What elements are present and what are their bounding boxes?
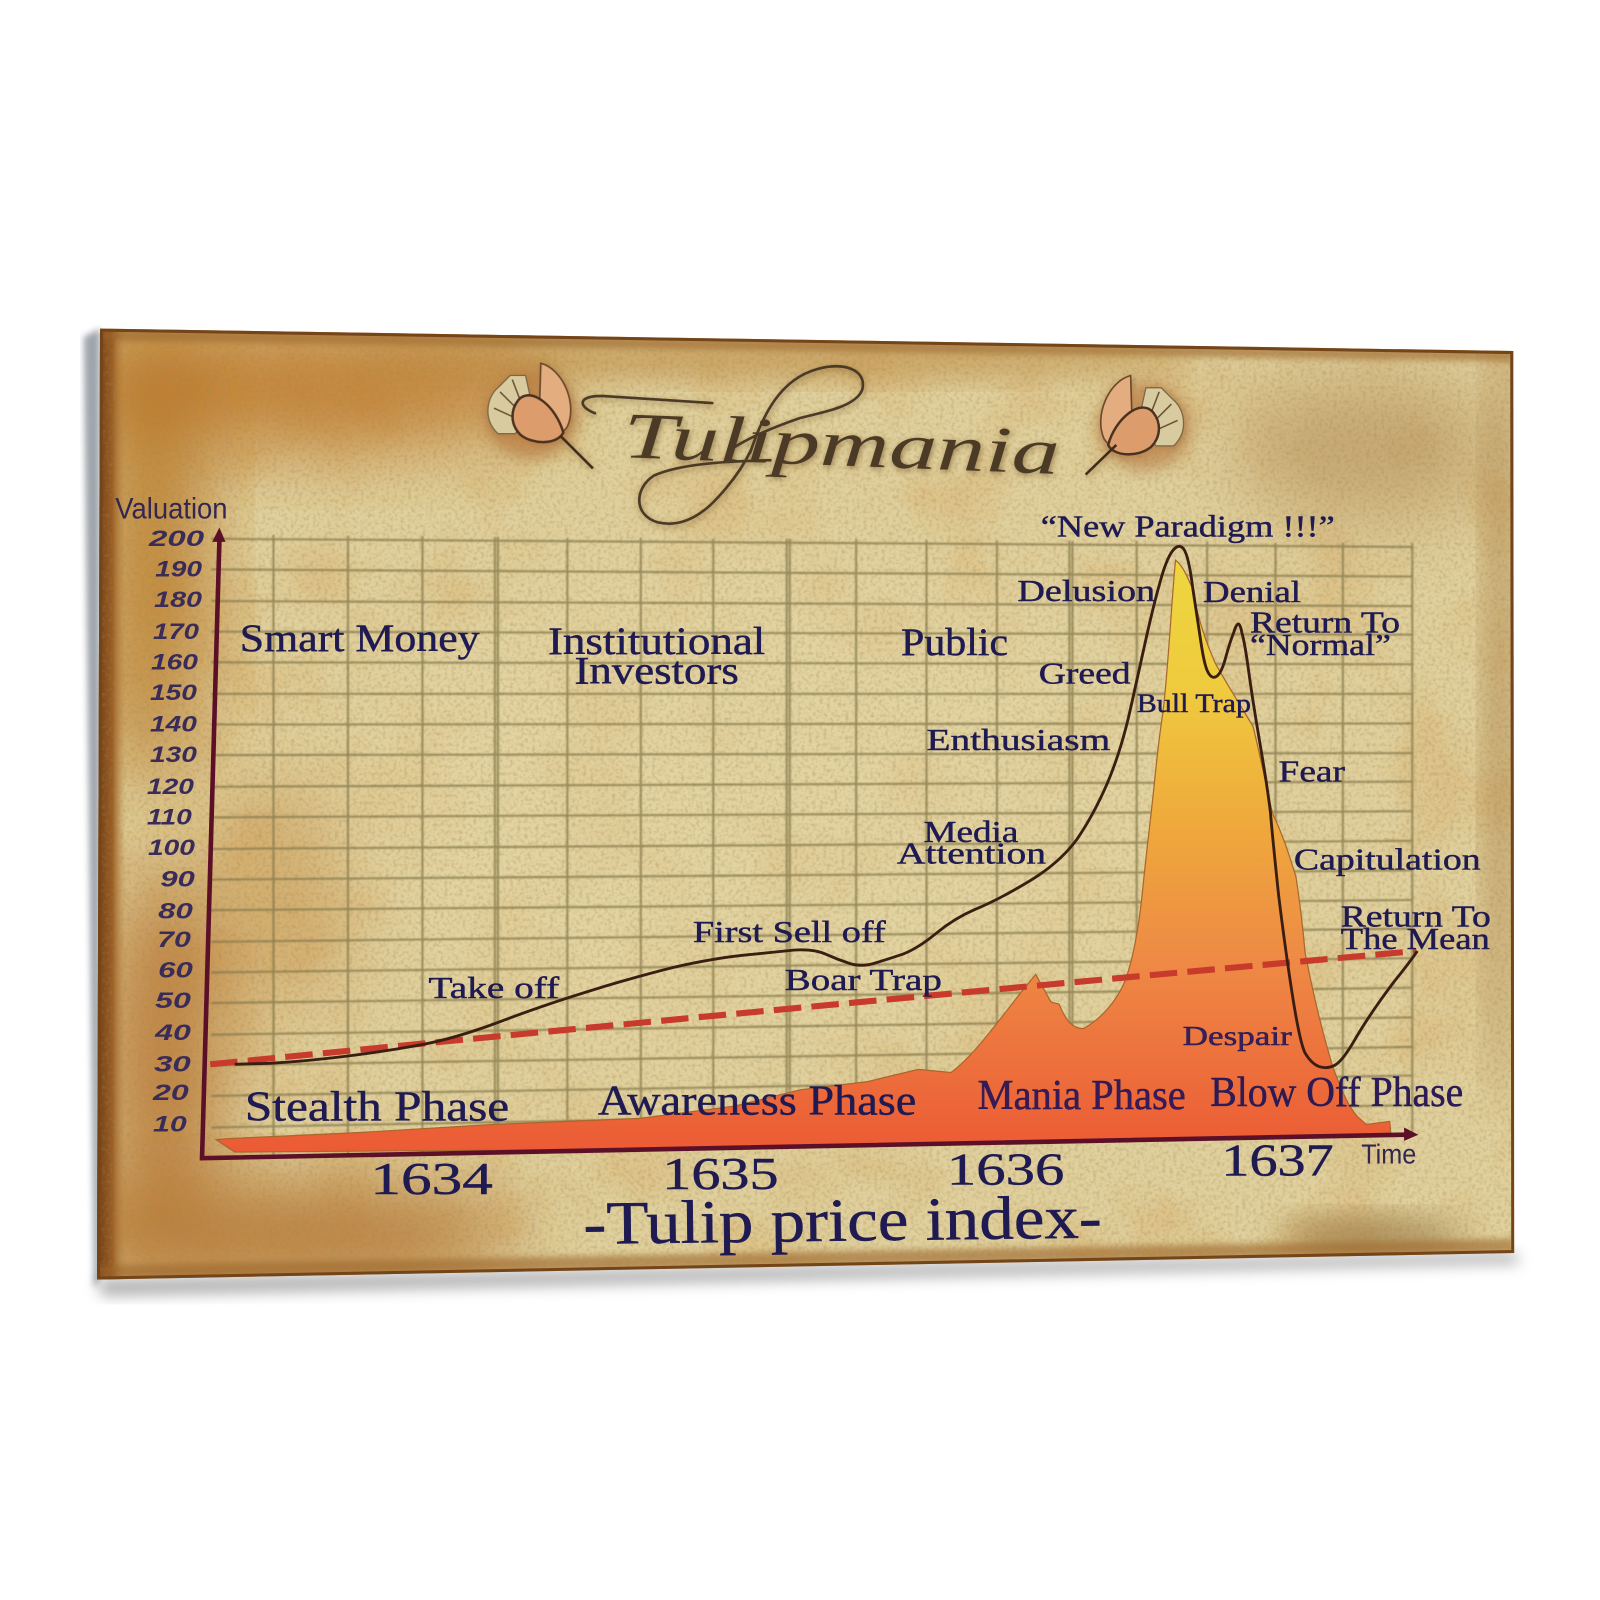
curve stage labels: Media — [923, 815, 1019, 849]
phase labels: Stealth Phase — [245, 1084, 509, 1130]
dashed trend line — [210, 951, 1416, 1064]
y axis labels: 170 — [153, 619, 200, 644]
investor labels: Public — [901, 621, 1008, 664]
y axis labels: 160 — [151, 649, 199, 674]
icon: left tulip — [486, 363, 593, 468]
axes — [202, 528, 1418, 1158]
curve stage labels: Enthusiasm — [927, 723, 1110, 757]
title flourishes — [583, 366, 863, 524]
icon: right tulip — [1086, 376, 1188, 474]
phase labels — [245, 1070, 1463, 1130]
curve stage labels: Fear — [1279, 755, 1345, 789]
canvas drop shadow — [84, 329, 1520, 1296]
y axis labels: 50 — [155, 988, 192, 1013]
y axis labels: 80 — [158, 898, 194, 923]
phase labels: Mania Phase — [978, 1073, 1186, 1119]
y axis labels: 30 — [154, 1051, 192, 1076]
y axis labels: 10 — [153, 1112, 187, 1137]
investor labels: Investors — [574, 650, 739, 693]
price curve — [235, 546, 1417, 1068]
area: tulip price fill — [216, 560, 1391, 1152]
y axis labels — [147, 526, 205, 1137]
x axis title: Time — [1361, 1138, 1416, 1169]
y axis labels: 20 — [152, 1080, 190, 1105]
y axis title: Valuation — [115, 492, 228, 525]
curve stage labels: Return To — [1341, 900, 1491, 934]
curve stage labels: Take off — [429, 971, 560, 1005]
y axis labels: 60 — [158, 958, 194, 983]
y axis labels: 150 — [150, 680, 198, 705]
curve stage labels: First Sell off — [693, 915, 887, 949]
curve stage labels: Greed — [1039, 657, 1131, 691]
y axis labels: 200 — [148, 526, 205, 551]
y axis labels: 70 — [157, 927, 192, 952]
curve stage labels: Denial — [1203, 575, 1301, 609]
curve stage labels: Capitulation — [1294, 842, 1481, 876]
investor labels — [240, 617, 1008, 693]
curve stage labels: “New Paradigm !!!” — [1041, 510, 1335, 544]
year labels: 1636 — [947, 1144, 1064, 1195]
y axis labels: 140 — [150, 712, 198, 737]
year labels: 1637 — [1221, 1135, 1334, 1186]
investor labels: Smart Money — [240, 617, 480, 660]
curve stage labels: The Mean — [1341, 922, 1490, 956]
curve stage labels: Delusion — [1017, 574, 1155, 608]
curve stage labels: Return To — [1250, 606, 1400, 640]
y axis labels: 40 — [154, 1020, 192, 1045]
y axis labels: 130 — [150, 742, 198, 767]
y axis labels: 110 — [147, 804, 192, 829]
phase labels: Awareness Phase — [598, 1078, 916, 1124]
y axis labels: 120 — [147, 774, 195, 799]
curve stage labels: Attention — [897, 836, 1046, 870]
grid lines — [211, 535, 1413, 1157]
y axis labels: 180 — [154, 587, 203, 612]
year labels — [370, 1135, 1334, 1204]
chart: tulip price index — [115, 492, 1491, 1204]
investor labels: Institutional — [548, 620, 765, 663]
y axis labels: 90 — [160, 867, 196, 892]
phase labels: Blow Off Phase — [1210, 1070, 1463, 1116]
chart subtitle: -Tulip price index- — [583, 1184, 1102, 1258]
y axis labels: 190 — [155, 557, 203, 582]
year labels: 1634 — [370, 1153, 493, 1204]
panel: aged parchment canvas — [51, 306, 1520, 1286]
y axis labels: 100 — [148, 835, 196, 860]
curve stage labels — [429, 510, 1491, 1051]
curve stage labels: “Normal” — [1250, 628, 1391, 662]
curve stage labels: Despair — [1183, 1020, 1292, 1051]
curve stage labels: Bull Trap — [1137, 688, 1251, 718]
curve stage labels: Boar Trap — [785, 963, 942, 997]
title text: Tulipmania — [622, 400, 1061, 489]
title: Tulipmania with flanking tulips — [486, 363, 1188, 524]
year labels: 1635 — [662, 1148, 779, 1199]
